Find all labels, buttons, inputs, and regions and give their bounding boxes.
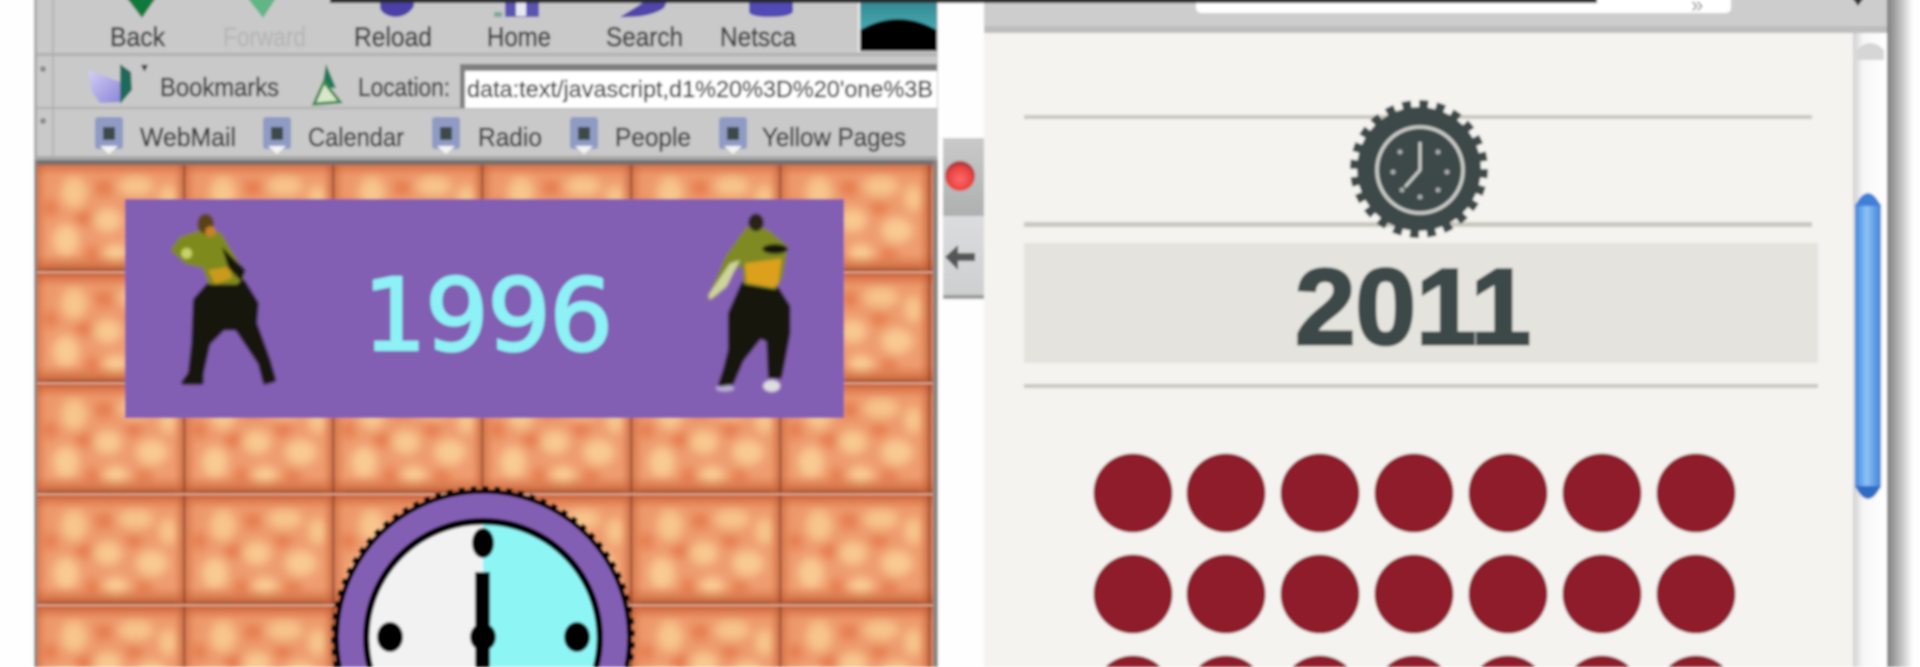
- toolbar button labels: [110, 22, 797, 52]
- icon: dancing figure left: [172, 214, 274, 383]
- icon: forward arrow: [243, 0, 280, 18]
- toolbar button labels: Forward: [223, 22, 306, 52]
- icon: gear clock badge: [1354, 104, 1484, 234]
- icon: search: [620, 0, 672, 17]
- browser toolbar 2011: [330, 0, 1888, 33]
- icon: home: [494, 0, 539, 17]
- toolbar button labels: Reload: [354, 22, 432, 52]
- icon: reload: [380, 0, 414, 17]
- icon: netscape logo: [858, 0, 937, 52]
- bookmark shortcuts row: Radio: [478, 122, 542, 152]
- icon: dancing figure right: [708, 214, 788, 392]
- toolbar button labels: Netsca: [720, 22, 797, 52]
- banner: 1996 purple header: [125, 199, 844, 418]
- bookmark shortcuts row: WebMail: [140, 122, 236, 152]
- bookmark shortcuts row: People: [615, 122, 691, 152]
- control tab between the windows: [943, 138, 984, 299]
- dot grid: red circles: [1094, 454, 1736, 667]
- background: orange brick wallpaper: [34, 160, 938, 667]
- browser toolbar 1996: ▾: [141, 59, 148, 75]
- page background: [984, 33, 1854, 667]
- toolbar button labels: Home: [487, 22, 551, 52]
- year 2011: 2011: [1295, 246, 1531, 367]
- divider lines: [1024, 115, 1818, 388]
- panel: 1996 Netscape browser window: [34, 0, 938, 667]
- bookmark shortcuts row: [95, 117, 906, 154]
- location label: Location:: [358, 72, 450, 102]
- browser toolbar 1996: [34, 0, 938, 162]
- year band: [1024, 243, 1818, 367]
- bookmark shortcuts row: Calendar: [308, 122, 404, 152]
- toolbar button labels: Back: [110, 22, 165, 52]
- url field: data:text/javascript,d1%20%3D%20'one%3B: [467, 76, 933, 102]
- bookmark shortcuts row: Yellow Pages: [762, 122, 906, 152]
- icon: red close button: [945, 161, 975, 191]
- icon: netscape: [749, 0, 793, 17]
- window right edge shadow: [1887, 0, 1913, 667]
- toolbar button labels: Search: [606, 22, 683, 52]
- icon: bookmarks: [88, 64, 132, 104]
- bookmarks label: Bookmarks: [160, 72, 279, 102]
- icon: location: [314, 64, 340, 104]
- icon: half white half cyan clock: [333, 488, 633, 667]
- year 1996: 1996: [363, 257, 613, 374]
- icon: back arrow: [122, 0, 160, 18]
- icon: back arrow: [945, 245, 975, 270]
- url field: [460, 64, 937, 108]
- scrollbar: [1853, 33, 1887, 667]
